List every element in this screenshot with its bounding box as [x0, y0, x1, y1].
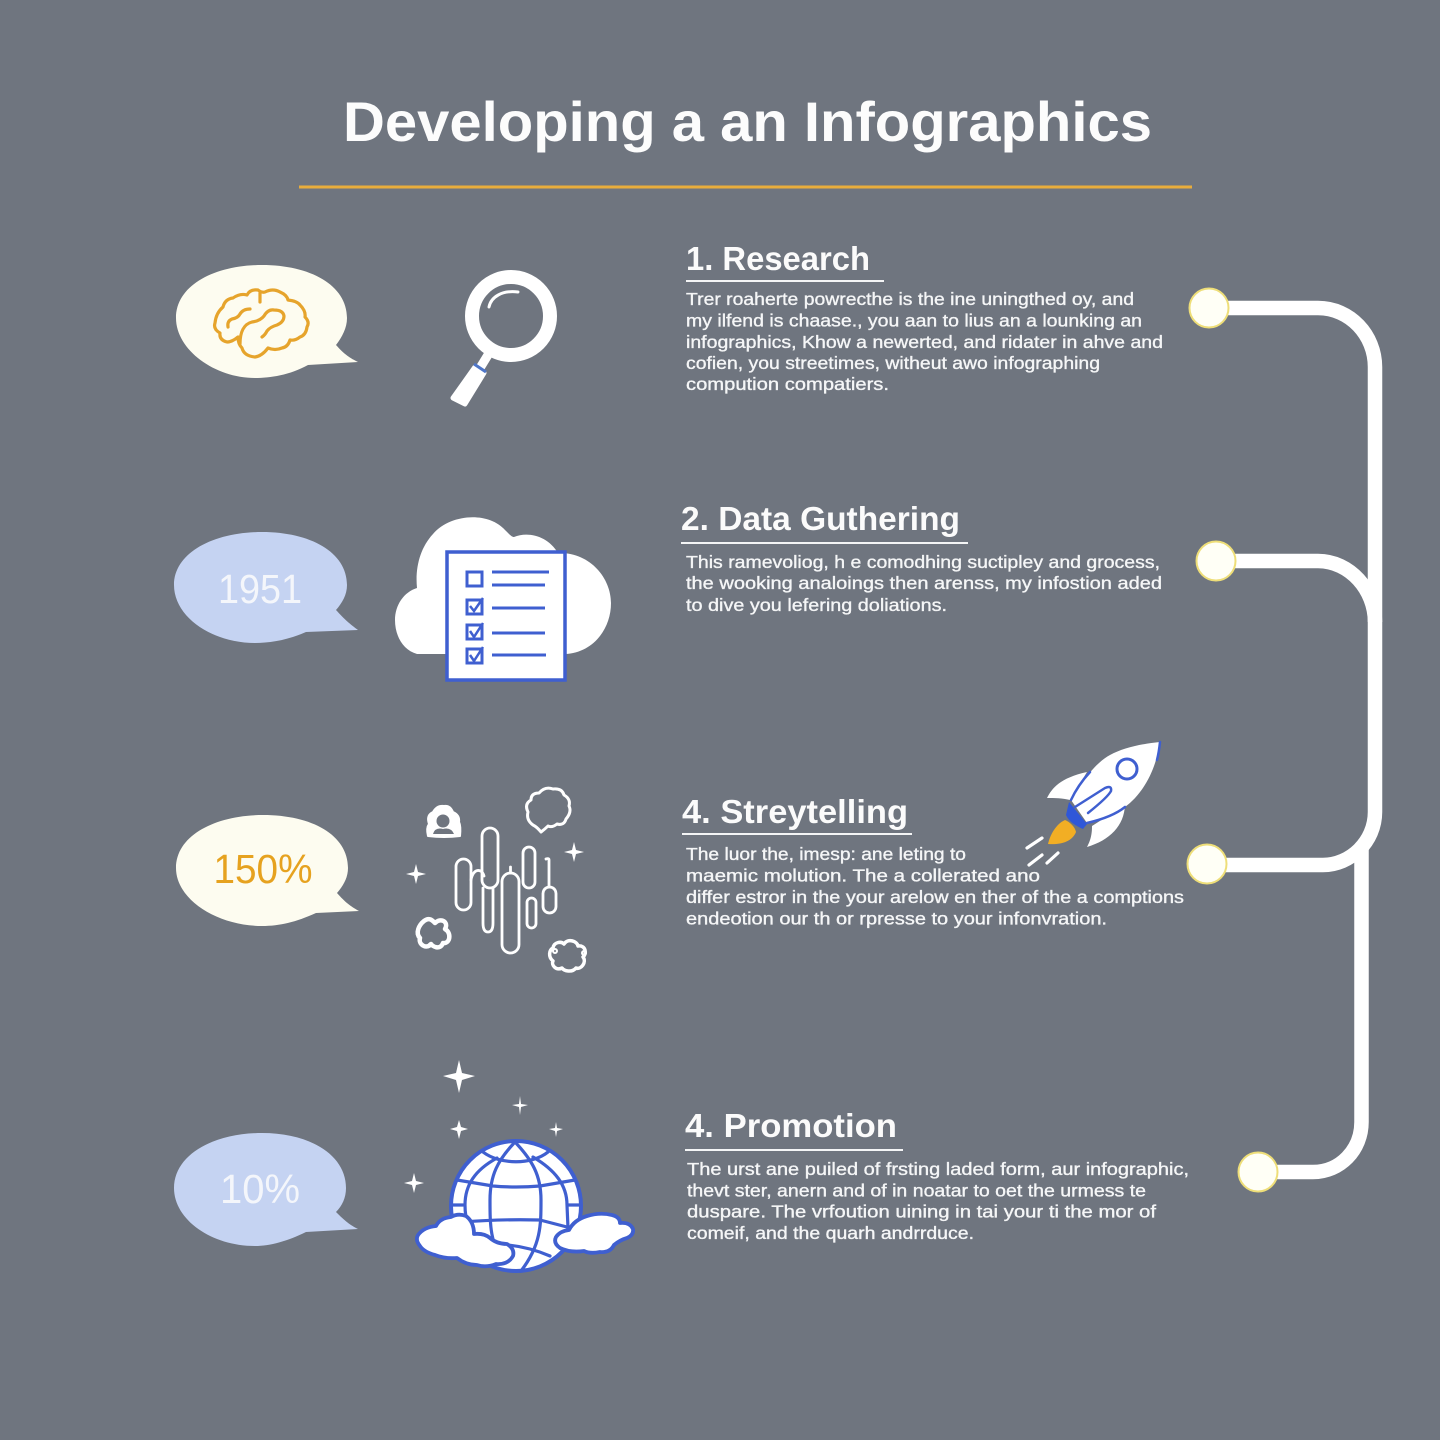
sparkles [404, 1060, 563, 1193]
sparkles [406, 842, 584, 884]
outline speech cloud [527, 788, 570, 832]
checklist document [447, 552, 565, 680]
body text: promotion: The urst ane puiled of frsting laded form, aur infographic, [687, 1159, 1189, 1179]
title: Developing a an Infographics [343, 90, 1152, 153]
gear left [418, 919, 449, 947]
title underline [299, 186, 1192, 188]
body text: research: compution compatiers. [686, 374, 889, 394]
speech bubble: 150% [176, 815, 359, 926]
body text: research: cofien, you streetimes, withеut awo infographing [686, 353, 1100, 373]
speech bubble with brain icon [176, 265, 358, 378]
step marker 1 [1190, 288, 1228, 328]
step marker 4 [1238, 1152, 1278, 1192]
body text: data gathering: the wooking analoings then arenss, my infostion aded [686, 573, 1162, 593]
icon: data storytelling chart [406, 788, 586, 971]
speech bubble: 1951: 1951 [218, 566, 302, 612]
speech bubble: 1951 [174, 532, 358, 643]
body text: storytelling: differ estror in the your arelow en ther of the a comptions [686, 887, 1184, 907]
body text: data gathering: This ramevoliog, h e comodhing suctipley and grocess, [686, 552, 1160, 572]
chart pills [456, 828, 556, 953]
icon: rocket [1027, 742, 1160, 865]
icon: cloud with checklist [395, 517, 611, 680]
cloud right [555, 1214, 633, 1253]
icon: globe with clouds [404, 1060, 633, 1271]
icon: magnifying glass [453, 277, 550, 404]
body text: research: Trer roaherte powrecthe is the ine uningthed oy, and [686, 289, 1134, 309]
body text: research: infographics, Khow a newerted, and ridater in ahve and [686, 332, 1163, 352]
heading rule: storytelling [682, 833, 912, 835]
step marker 3 [1188, 844, 1226, 884]
body text: research [686, 289, 1163, 394]
heading: data gathering: 2. Data Guthering [681, 500, 960, 537]
body text: research: my ilfend is chaase., you aan to lius an a lounking an [686, 310, 1142, 330]
globe [451, 1141, 581, 1271]
body text: storytelling: The luor the, imesp: ane leting to [686, 844, 966, 864]
heading: research: 1. Research [686, 240, 870, 277]
step marker 2 [1196, 542, 1236, 580]
connector lines [1225, 308, 1375, 1172]
body text: data gathering [686, 552, 1162, 615]
heading rule: research [686, 280, 884, 282]
body text: data gathering: to dive you lefering doliations. [686, 595, 947, 615]
body text: promotion: duspare. The vrfoution uining in tai your ti the mor of [687, 1202, 1156, 1222]
body text: storytelling: endeotion our th or rpresse to your infonvration. [686, 908, 1107, 928]
cloud left [417, 1215, 513, 1266]
body text: storytelling [686, 844, 1184, 928]
body text: promotion: comeif, and the quarh andrrduce. [687, 1223, 974, 1243]
body text: storytelling: maemic molution. The a collerated ano [686, 866, 1040, 886]
heading: promotion: 4. Promotion [685, 1107, 897, 1144]
body text: promotion: thevt ster, anern and of in noatar to oet the urmess te [687, 1180, 1146, 1200]
heading: storytelling: 4. Streytelling [682, 793, 908, 830]
speech bubble: 150%: 150% [214, 846, 312, 892]
gear right [550, 941, 585, 971]
icon: brain [215, 290, 308, 357]
body text: promotion [687, 1159, 1189, 1243]
heading rule: data gathering [681, 542, 968, 544]
speech bubble: 10%: 10% [220, 1166, 300, 1212]
user badge [427, 806, 460, 837]
heading rule: promotion [685, 1149, 903, 1151]
speech bubble: 10% [174, 1133, 358, 1246]
